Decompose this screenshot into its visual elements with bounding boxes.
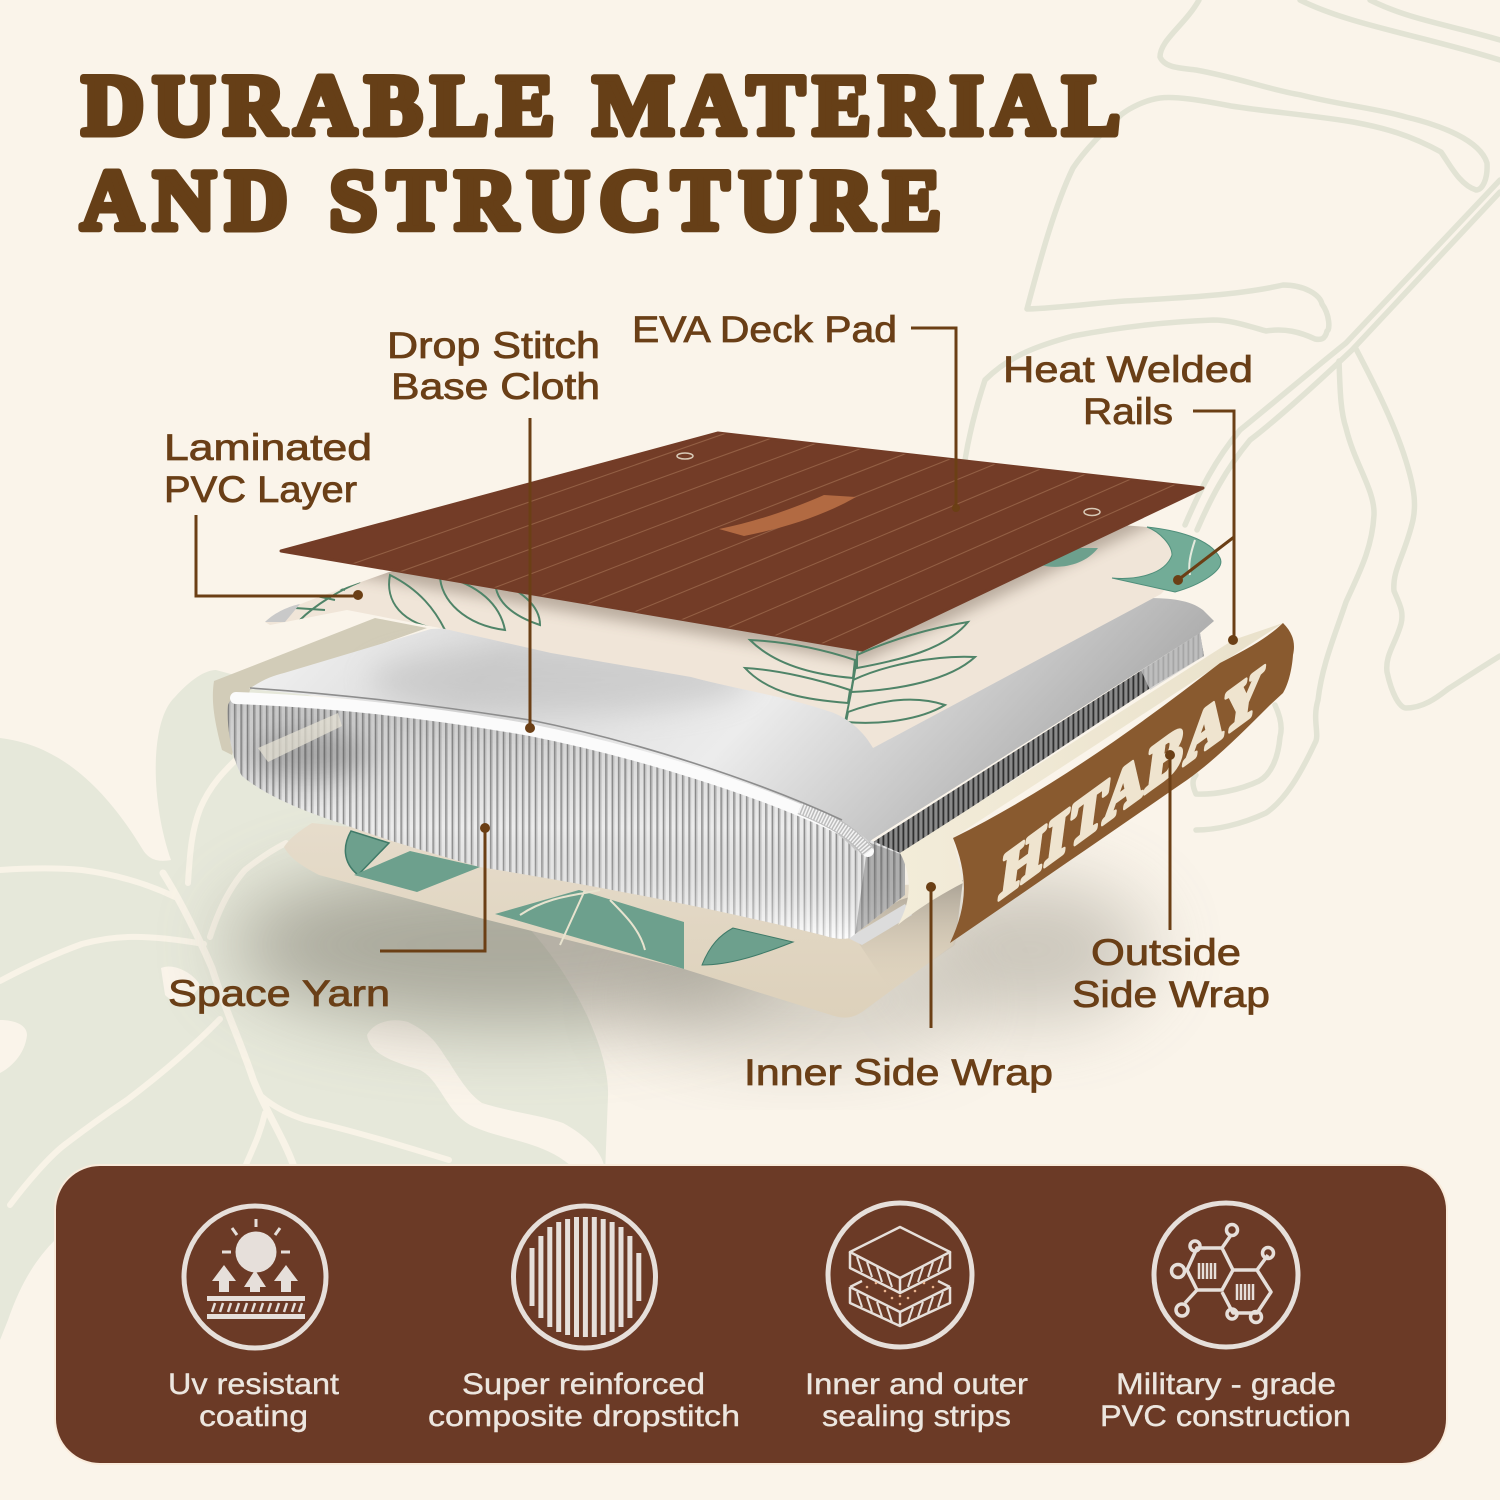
- callout: heat welded rails: Heat Welded: [1003, 349, 1253, 390]
- caption: composite dropstitch: [428, 1400, 740, 1433]
- caption: Military - grade: [1116, 1368, 1336, 1401]
- exploded board diagram: [135, 430, 1294, 1018]
- callout: drop stitch base cloth: Drop Stitch: [387, 325, 600, 366]
- layer: back left side wrap: [213, 618, 427, 755]
- callout: outside side wrap: Outside: [1091, 932, 1241, 973]
- drop shadow under board: [230, 865, 1150, 1055]
- callout: EVA deck pad: [632, 309, 960, 512]
- feature: dropstitch: [428, 1206, 740, 1433]
- icon: stacked slabs: [828, 1203, 972, 1347]
- callout: laminated PVC layer: Laminated: [164, 427, 372, 468]
- deck handle: [719, 495, 856, 536]
- callout: heat welded rails: Rails: [1083, 391, 1173, 432]
- caption: [168, 1368, 340, 1433]
- layer: space yarn body: [228, 598, 1214, 945]
- callout: laminated PVC layer: PVC Layer: [164, 469, 357, 510]
- caption: Inner and outer: [805, 1368, 1028, 1401]
- caption: Uv resistant: [168, 1368, 340, 1401]
- right side dark stripes: [873, 633, 1204, 855]
- layer: bottom side wrap: [284, 823, 963, 1018]
- caption: coating: [199, 1400, 308, 1433]
- layer: EVA deck pad: [280, 432, 1204, 652]
- top cushion surface: [249, 598, 1214, 851]
- callout: space yarn: [168, 823, 490, 1014]
- callout: space yarn: Space Yarn: [168, 973, 390, 1014]
- caption: [805, 1368, 1028, 1433]
- callout: EVA deck pad: EVA Deck Pad: [632, 309, 897, 350]
- decorative leaf: monstera bottom left: [0, 670, 608, 1340]
- caption: PVC construction: [1100, 1400, 1351, 1433]
- decorative leaf: outline top right: [964, 0, 1500, 830]
- title: DURABLE MATERIAL: [82, 57, 1120, 153]
- callout: drop stitch base cloth: Base Cloth: [391, 366, 600, 407]
- caption: [1100, 1368, 1351, 1433]
- title: [81, 57, 1120, 248]
- icon: sun and coating: [184, 1206, 326, 1348]
- tray rim: [848, 904, 912, 945]
- panel: features: [55, 1165, 1447, 1464]
- callout: outside side wrap: [1072, 750, 1270, 1015]
- feature: sealing strips: [805, 1203, 1028, 1433]
- layer: laminated PVC with leaf print: [265, 526, 1222, 748]
- title: AND STRUCTURE: [81, 152, 941, 248]
- caption: Super reinforced: [462, 1368, 705, 1401]
- feature: uv resistant: [168, 1206, 340, 1433]
- feature: military grade PVC: [1100, 1203, 1351, 1433]
- icon: molecule: [1154, 1203, 1298, 1347]
- callout: outside side wrap: Side Wrap: [1072, 974, 1270, 1015]
- front yarn face: [228, 693, 905, 939]
- icon: vertical stripes: [514, 1206, 656, 1348]
- callout: drop stitch base cloth: [387, 325, 600, 733]
- outer side wrap with brand: [898, 623, 1294, 943]
- caption: sealing strips: [822, 1400, 1011, 1433]
- brand wordmark: HITABAY: [997, 652, 1267, 914]
- white stitched lip: [236, 698, 868, 851]
- callout: heat welded rails: [1003, 349, 1253, 645]
- caption: [428, 1368, 740, 1433]
- callout: inner side wrap: [744, 882, 1053, 1093]
- callout: laminated PVC layer: [164, 427, 372, 600]
- callout: inner side wrap: Inner Side Wrap: [744, 1052, 1053, 1093]
- deck grommets: [677, 453, 693, 459]
